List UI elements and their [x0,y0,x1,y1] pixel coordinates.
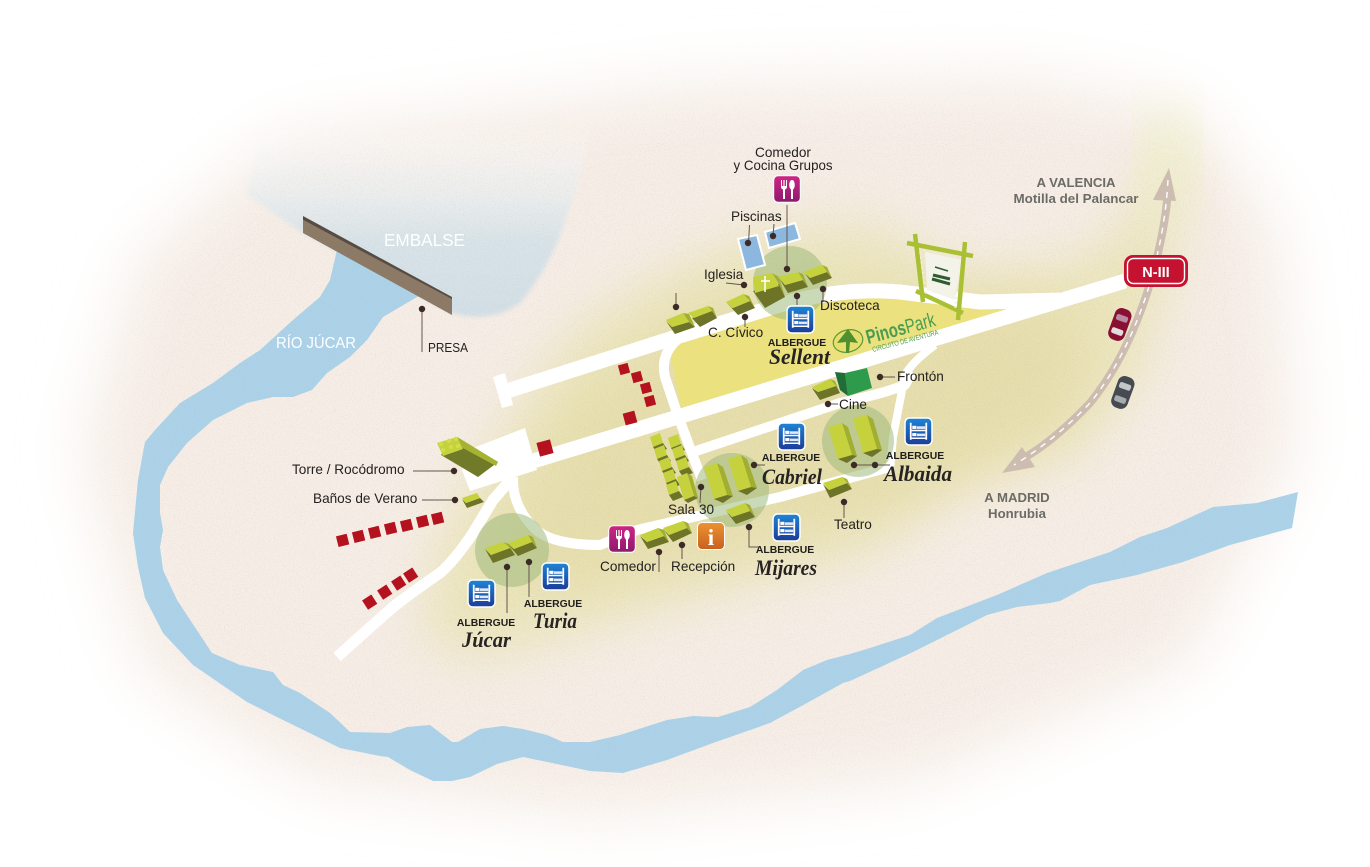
buildings: Cine and Frontón [812,368,872,400]
label: Albergue Albaida: ALBERGUE [886,451,944,462]
road network [337,281,1125,657]
label: Albergue Sellent: Sellent [769,344,831,369]
labels: facilities: y Cocina Grupos [734,158,833,173]
label: Albergue Mijares: Mijares [754,555,817,580]
panel: yellow park area [670,296,1005,412]
labels: facilities: Piscinas [731,209,782,224]
labels: facilities: Baños de Verano [313,491,417,506]
icon: bunk Mijares [773,514,800,541]
road sign: N-III [1124,255,1188,287]
labels: water: PRESA [428,341,469,355]
buildings: south row [640,477,852,549]
zone circle: Sellent [753,246,827,320]
zone circle: Albaida [822,405,894,477]
icon: information: i [708,525,715,550]
buildings: north row [666,265,832,334]
labels: facilities: Cine [839,397,867,412]
car: grey [1109,374,1136,411]
labels: facilities: Frontón [897,369,944,384]
buildings: Júcar y Turia [485,535,537,563]
red cabins: row two [362,568,418,610]
labels: destinations: A VALENCIA [1036,175,1116,190]
label: Albergue Mijares [754,545,817,580]
label: Albergue Júcar: ALBERGUE [457,618,515,629]
grain texture [90,80,1294,817]
icon: bunk Júcar [468,580,495,607]
swimming pools [738,223,800,270]
buildings: Albaida [828,415,882,463]
label: Albergue Turia: Turia [533,608,577,633]
labels: destinations: Honrubia [988,506,1047,521]
route arrow: N-III [1002,168,1176,473]
buildings: Sala 30 cluster [650,433,698,503]
leader lines and dots [413,205,895,613]
panel: reservoir [247,125,590,317]
labels: destinations: Motilla del Palancar [1014,191,1138,206]
icon: bunk Turia [542,563,569,590]
label: Albergue Cabriel [762,453,823,489]
labels: facilities: Torre / Rocódromo [292,462,405,477]
logo: Pinos Park: PinosPark [864,309,939,349]
river [133,250,1298,781]
labels: destinations [984,175,1138,521]
label: Albergue Turia [524,599,582,633]
logo: Pinos Park: CIRCUITO DE AVENTURA [871,328,939,354]
label: Albergue Albaida [882,451,952,486]
icon: bunk Cabriel [778,423,805,450]
label: Albergue Júcar: Júcar [461,627,511,652]
red cabins: centre [536,363,656,457]
tower [437,437,498,477]
icon: information [698,522,724,550]
labels: facilities: Iglesia [704,267,744,282]
icon: bunk Albaida [905,418,932,445]
building: Baños de Verano [462,493,484,508]
label: Albergue Mijares: ALBERGUE [756,545,814,556]
logo: Pinos Park [831,309,939,356]
labels: facilities [292,145,944,574]
buildings: Cabriel [704,455,757,503]
labels: facilities: C. Cívico [708,325,763,340]
labels: facilities: Sala 30 [668,502,715,517]
labels: facilities: Recepción [671,559,735,574]
label: Albergue Cabriel: Cabriel [762,464,823,489]
panel: sand land background [85,80,1295,815]
labels: facilities: Teatro [834,517,872,532]
labels: facilities: Comedor [755,145,811,160]
labels: water: EMBALSE [384,230,465,250]
sign: Pinos Park entrance [907,234,973,320]
label: Albergue Cabriel: ALBERGUE [762,453,820,464]
labels: water: RÍO JÚCAR [276,335,356,352]
label: Albergue Turia: ALBERGUE [524,599,582,610]
car: red [1106,306,1133,343]
road sign: N-III: N-III [1142,265,1170,281]
red cabins: row one [336,512,444,547]
icon: dining, groups [774,176,800,202]
labels: water [276,230,469,355]
label: Albergue Júcar [457,618,515,652]
dam [303,216,452,315]
zone circle: Júcar y Turia [475,513,549,587]
labels: facilities: Comedor [600,559,656,574]
labels: facilities: Discoteca [820,298,880,313]
zone circle: Cabriel [695,453,769,527]
labels: destinations: A MADRID [984,490,1050,505]
icon: dining [609,526,635,552]
label: Albergue Sellent: ALBERGUE [768,338,826,349]
icon: bunk Sellent [787,306,814,333]
label: Albergue Albaida: Albaida [882,461,952,486]
